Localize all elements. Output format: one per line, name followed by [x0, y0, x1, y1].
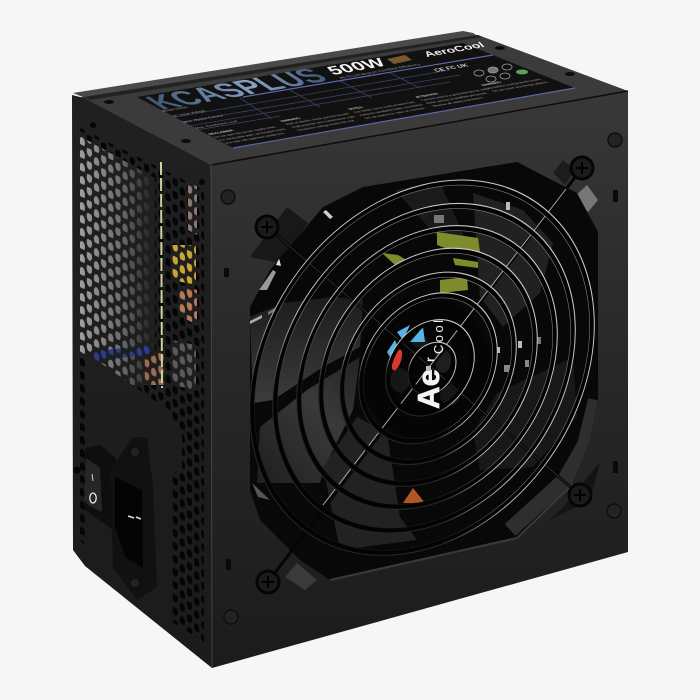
power supply unit [70, 31, 628, 668]
hub disc [359, 295, 491, 439]
second warning block [479, 74, 550, 92]
disclaimer block: Use only with approved equipment. [223, 132, 286, 144]
hub logo: Ae [411, 369, 446, 409]
hub logo: Cool [431, 320, 446, 354]
second warning block: Do not insert any foreign objects. [490, 80, 550, 92]
front panel [211, 91, 628, 668]
mounting slots [224, 190, 618, 570]
attention block: ATTENTION: [413, 92, 441, 98]
hub logo: r [423, 357, 437, 362]
specification row labels [161, 106, 238, 130]
certification marks: CE FC UK [433, 63, 471, 73]
brand logo: AeroCool [422, 41, 487, 59]
disclaimer block [206, 121, 293, 144]
notes block: Do not expose to water or moisture. [363, 107, 427, 119]
second warning block: WARNING: [479, 81, 503, 86]
wattage: 500W [324, 56, 390, 78]
warning block: WARNING: [278, 117, 302, 122]
attention block: Observe all safety instructions. [430, 96, 486, 107]
corner holes [74, 122, 205, 474]
power inlet [110, 437, 157, 600]
second warning block: Hazardous energy levels inside. [485, 78, 543, 89]
product label [137, 41, 575, 148]
fan opening [250, 162, 598, 580]
fan frame lip [330, 484, 573, 580]
fan guard wires [250, 142, 594, 593]
internals seen through fan [248, 202, 541, 503]
disclaimer block: DISCLAIMER: [206, 129, 236, 135]
specifications table [175, 70, 460, 130]
specification row labels: AC Input Voltage [171, 110, 206, 118]
notes block: For indoor use in a dry environment. [352, 100, 417, 113]
specification row labels: Model Name [161, 106, 188, 113]
rivets [221, 133, 622, 624]
product name: KCASPLUS [137, 64, 336, 114]
ventilation holes with visible internals [80, 128, 204, 642]
notes block: Keep the ventilation holes uncovered. [357, 103, 425, 116]
disclaimer block: No serviceable parts are located inside. [217, 127, 288, 141]
screw crosses [261, 162, 588, 588]
attention block: Refer service to qualified personnel. [424, 91, 489, 104]
top panel [76, 35, 628, 165]
fan blades [250, 182, 577, 550]
side panel [70, 95, 212, 668]
corner tabs [250, 160, 600, 590]
fan screws [256, 157, 593, 593]
warning block [278, 109, 363, 131]
warning block: Unplug before any maintenance work. [289, 115, 358, 128]
internal board edge [161, 162, 162, 388]
hub sticker colour marks [387, 325, 425, 372]
attention block [413, 84, 503, 107]
top lip [73, 31, 478, 100]
attention block: Connect only to a grounded power outlet. [419, 87, 493, 101]
power switch [84, 445, 116, 530]
hub centre mark [426, 366, 431, 371]
fan [248, 182, 596, 550]
disclaimer block: Do not open the power supply cover. [212, 125, 278, 138]
notes block: NOTES: [346, 106, 365, 110]
frame corner sheen [510, 400, 596, 530]
specification row labels: Max. Output Current [182, 114, 225, 124]
warning block: Hazardous voltage inside this unit. [295, 119, 357, 131]
specification row labels: Max. Combined Load [194, 120, 238, 130]
hub logo [411, 320, 446, 409]
certification marks [433, 63, 528, 82]
notes block [346, 97, 430, 119]
badge [387, 55, 412, 64]
tagline: 80 PLUS Bronze Certified Efficiency [338, 62, 422, 80]
warning block: Risk of electric shock and fire hazard. [284, 112, 351, 125]
